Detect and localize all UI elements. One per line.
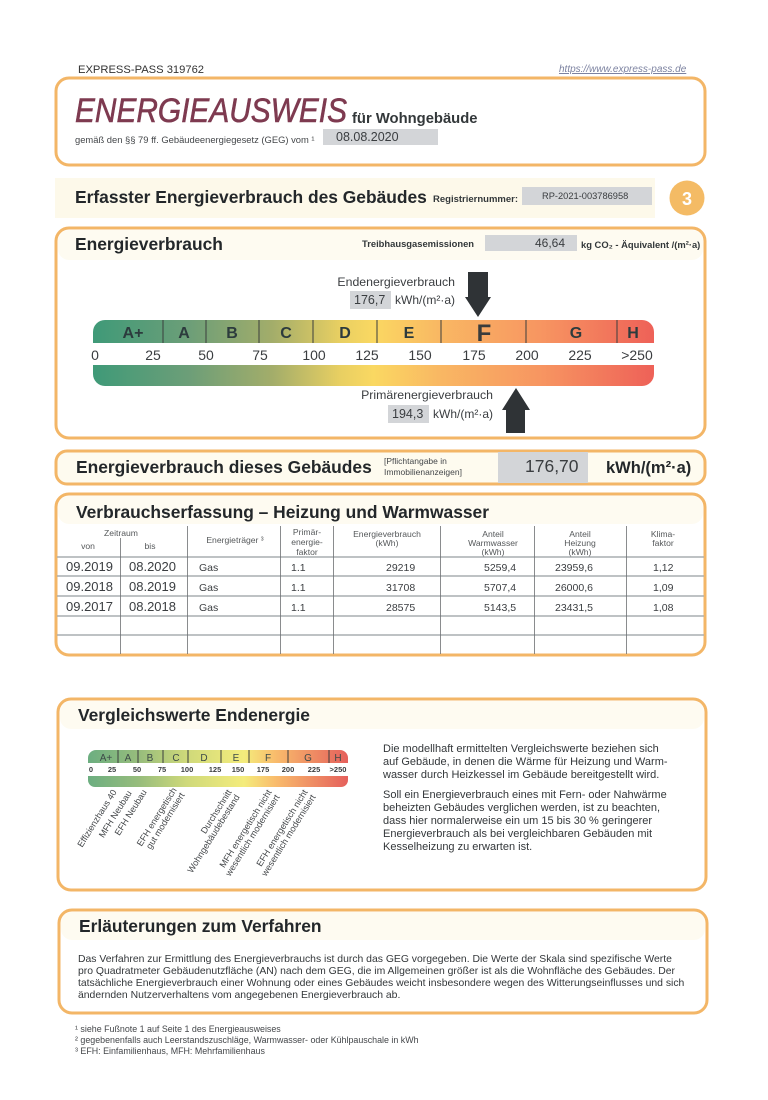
panel: Energieverbrauch dieses Gebäudes — [56, 451, 705, 484]
scale bar: H — [627, 325, 639, 342]
small scale numbers: 50 — [133, 765, 141, 774]
scale bar: A — [178, 325, 190, 342]
page header — [78, 64, 687, 76]
final energy label: 176,7 — [354, 293, 385, 307]
row 2018-2019: 08.2019 — [129, 579, 176, 594]
small scale bar: F — [265, 753, 271, 764]
scale numbers: 175 — [462, 347, 486, 363]
row 2017-2018: Gas — [199, 602, 218, 614]
small scale numbers: >250 — [330, 765, 346, 774]
small scale numbers: 225 — [308, 765, 320, 774]
small scale bar: E — [233, 753, 240, 764]
scale numbers: 225 — [568, 347, 592, 363]
table: Anteil — [569, 529, 591, 539]
rotated building labels: Durchschnitt — [199, 787, 234, 835]
scale numbers: >250 — [621, 347, 653, 363]
arrow: final energy — [465, 272, 491, 317]
section banner: RP-2021-003786958 — [542, 191, 628, 201]
greenhouse gas emissions: Treibhausgasemissionen — [362, 238, 474, 249]
heading: Erläuterungen zum Verfahren — [79, 916, 322, 936]
explanation text: ändernden Nutzerverhaltens vom angegebenen Energieverbrauch ab. — [78, 990, 400, 1001]
comparison text: Soll ein Energieverbrauch eines mit Fern- oder Nahwärme — [383, 789, 667, 801]
scale numbers: 100 — [302, 347, 326, 363]
row 2018-2019: 5707,4 — [484, 582, 516, 594]
date field — [323, 129, 438, 145]
scale bar: D — [339, 325, 351, 342]
small scale bar: A+ — [100, 753, 112, 764]
section banner: Erfasster Energieverbrauch des Gebäudes — [75, 187, 427, 207]
row 2017-2018: 28575 — [386, 602, 415, 614]
table: von — [81, 541, 95, 551]
row 2019-2020: 08.2020 — [129, 559, 176, 574]
page header: EXPRESS-PASS 319762 — [78, 64, 204, 76]
rotated building labels: wesentlich modernisiert — [223, 792, 282, 879]
small scale bar: A — [125, 753, 132, 764]
comparison text: wasser durch Heizkessel im Gebäude bereitgestellt wird. — [382, 769, 659, 781]
scale bar: A+ — [123, 325, 143, 342]
scale numbers: 0 — [91, 347, 99, 363]
row 2018-2019: 09.2018 — [66, 579, 113, 594]
scale numbers — [91, 347, 653, 363]
heading: Vergleichswerte Endenergie — [78, 705, 310, 725]
panel: Vergleichswerte — [58, 699, 706, 890]
comparison text: dass hier normalerweise ein um 15 bis 30 % geringerer — [383, 815, 652, 827]
row 2019-2020: 1,12 — [653, 562, 674, 574]
small scale numbers — [89, 765, 346, 774]
scale bar: E — [404, 325, 415, 342]
row 2017-2018: 23431,5 — [555, 602, 593, 614]
table: (kWh) — [376, 538, 399, 548]
table: faktor — [296, 547, 318, 557]
small primary bar — [88, 776, 348, 787]
scale bar: F — [477, 320, 491, 347]
small scale numbers: 150 — [232, 765, 244, 774]
row 2018-2019: Gas — [199, 582, 218, 594]
comparison text — [382, 743, 668, 853]
page badge — [670, 180, 704, 216]
table: Primär- — [293, 527, 321, 537]
small scale numbers: 175 — [257, 765, 269, 774]
row 2019-2020 — [66, 559, 674, 574]
scale numbers: 50 — [198, 347, 214, 363]
panel: Energieverbrauch dieses Gebäudes: 176,70 — [525, 456, 579, 476]
row 2017-2018: 08.2018 — [129, 599, 176, 614]
comparison text: beheizten Gebäudes verglichen werden, ist zu beachten, — [383, 802, 660, 814]
small scale bar: B — [147, 753, 154, 764]
rotated building labels: MFH Neubau — [97, 789, 134, 839]
rotated building labels: Wohngebäudebestand — [185, 793, 242, 875]
scale numbers: 25 — [145, 347, 161, 363]
subtitle: für Wohngebäude — [352, 111, 478, 127]
greenhouse gas emissions: kg CO₂ - Äquivalent /(m²·a) — [581, 239, 700, 250]
table: Heizung — [564, 538, 596, 548]
rotated building labels: gut modernisiert — [144, 790, 187, 851]
row 2017-2018: 1.1 — [291, 602, 306, 614]
greenhouse gas emissions: 46,64 — [535, 236, 565, 250]
small scale numbers: 75 — [158, 765, 166, 774]
small scale numbers: 25 — [108, 765, 116, 774]
scale numbers: 75 — [252, 347, 268, 363]
comparison text: auf Gebäude, in denen die Wärme für Heizung und Warm- — [383, 756, 668, 768]
row 2018-2019: 1,09 — [653, 582, 674, 594]
primary energy label — [361, 388, 493, 423]
scale bar — [93, 320, 654, 347]
table: bis — [144, 541, 156, 551]
page header: https://www.express-pass.de — [559, 64, 687, 75]
row 2019-2020: 5259,4 — [484, 562, 516, 574]
row 2019-2020: 29219 — [386, 562, 415, 574]
page badge: 3 — [682, 189, 692, 209]
heading: Energieverbrauch — [75, 234, 223, 254]
rotated building labels — [75, 786, 318, 879]
small scale bar: G — [304, 753, 312, 764]
small scale numbers: 0 — [89, 765, 93, 774]
rotated building labels: wesentlich modernisiert — [259, 792, 318, 879]
panel: Energieverbrauch dieses Gebäudes: Energieverbrauch dieses Gebäudes — [76, 457, 372, 477]
legal basis: gemäß den §§ 79 ff. Gebäudeenergiegesetz (GEG) vom ¹ — [75, 134, 315, 145]
panel: title — [56, 78, 705, 165]
panel: Energieverbrauch — [56, 228, 705, 438]
small scale numbers: 100 — [181, 765, 193, 774]
scale bar: C — [280, 325, 292, 342]
primary scale bar — [93, 365, 654, 386]
scale numbers: 200 — [515, 347, 539, 363]
table: Energieträger ³ — [206, 535, 264, 545]
rotated building labels: EFH Neubau — [113, 788, 149, 837]
footnotes: ² gegebenenfalls auch Leerstandszuschläge, Warmwasser- oder Kühlpauschale in kWh — [75, 1035, 419, 1045]
small scale bar — [88, 750, 348, 764]
table: Zeitraum — [104, 528, 138, 538]
primary energy label: Primärenergieverbrauch — [361, 388, 493, 402]
comparison text: Die modellhaft ermittelten Vergleichswerte beziehen sich — [383, 743, 659, 755]
explanation text: tatsächliche Energieverbrauch einer Wohnung oder eines Gebäudes weicht insbesondere wegen des Witterungseinflusses und sich — [78, 978, 685, 989]
small scale numbers: 125 — [209, 765, 221, 774]
section banner — [55, 178, 655, 218]
section banner: Registriernummer: — [433, 194, 518, 205]
title: ENERGIEAUSWEIS — [75, 92, 347, 130]
table: energie- — [291, 537, 323, 547]
footnotes — [75, 1024, 419, 1056]
rotated building labels: EFH energetisch nicht — [254, 787, 310, 868]
panel: Erläuterungen — [59, 910, 707, 1013]
final energy label — [337, 275, 455, 309]
row 2018-2019: 1.1 — [291, 582, 306, 594]
row 2017-2018: 5143,5 — [484, 602, 516, 614]
final energy label: Endenergieverbrauch — [337, 275, 455, 289]
table — [57, 526, 704, 654]
panel: Verbrauchserfassung — [56, 494, 705, 655]
row 2019-2020: 23959,6 — [555, 562, 593, 574]
small scale bar: H — [334, 753, 342, 764]
panel: Energieverbrauch dieses Gebäudes: kWh/(m²·a) — [606, 459, 691, 477]
row 2018-2019 — [66, 579, 674, 594]
scale bar: G — [570, 325, 582, 342]
explanation text: pro Quadratmeter Gebäudenutzfläche (AN) nach dem GEG, die im Allgemeinen größer ist als die Wohnfläche des Gebäudes. Der — [78, 966, 676, 977]
row 2019-2020: Gas — [199, 562, 218, 574]
table: faktor — [652, 538, 674, 548]
row 2018-2019: 31708 — [386, 582, 415, 594]
row 2017-2018: 09.2017 — [66, 599, 113, 614]
date field: 08.08.2020 — [336, 130, 399, 144]
row 2019-2020: 1.1 — [291, 562, 306, 574]
greenhouse gas emissions — [362, 235, 700, 251]
row 2017-2018 — [66, 599, 674, 614]
heading: Verbrauchserfassung – Heizung und Warmwasser — [76, 502, 489, 522]
panel: Energieverbrauch dieses Gebäudes: [Pflichtangabe in — [384, 456, 447, 466]
comparison text: Energieverbrauch als bei vergleichbaren Gebäuden mit — [383, 828, 652, 840]
primary energy label: 194,3 — [392, 407, 423, 421]
small scale numbers: 200 — [282, 765, 294, 774]
arrow: primary energy — [502, 388, 530, 433]
comparison text: Kesselheizung zu erwarten ist. — [383, 841, 532, 853]
rotated building labels: EFH energetisch — [135, 786, 179, 848]
panel: Energieverbrauch dieses Gebäudes: Immobilienanzeigen] — [384, 467, 462, 477]
final energy label: kWh/(m²·a) — [395, 293, 455, 307]
table: Warmwasser — [468, 538, 518, 548]
small scale bar: C — [172, 753, 180, 764]
row 2018-2019: 26000,6 — [555, 582, 593, 594]
rotated building labels: Effizienzhaus 40 — [75, 788, 119, 849]
table: (kWh) — [482, 547, 505, 557]
table: (kWh) — [569, 547, 592, 557]
rotated building labels: MFH energetisch nicht — [217, 787, 274, 869]
explanation text: Das Verfahren zur Ermittlung des Energieverbrauchs ist durch das GEG vorgegeben. Die Werte der Skala sind spezifische Werte — [78, 954, 672, 965]
footnotes: ¹ siehe Fußnote 1 auf Seite 1 des Energieausweises — [75, 1024, 281, 1034]
row 2017-2018: 1,08 — [653, 602, 674, 614]
table: Energieverbrauch — [353, 529, 421, 539]
table: Klima- — [651, 529, 675, 539]
explanation text — [78, 954, 685, 1001]
scale numbers: 125 — [355, 347, 379, 363]
scale bar: B — [226, 325, 238, 342]
scale numbers: 150 — [408, 347, 432, 363]
primary energy label: kWh/(m²·a) — [433, 407, 493, 421]
footnotes: ³ EFH: Einfamilienhaus, MFH: Mehrfamilienhaus — [75, 1046, 265, 1056]
small scale bar: D — [200, 753, 208, 764]
row 2019-2020: 09.2019 — [66, 559, 113, 574]
table: Anteil — [482, 529, 504, 539]
